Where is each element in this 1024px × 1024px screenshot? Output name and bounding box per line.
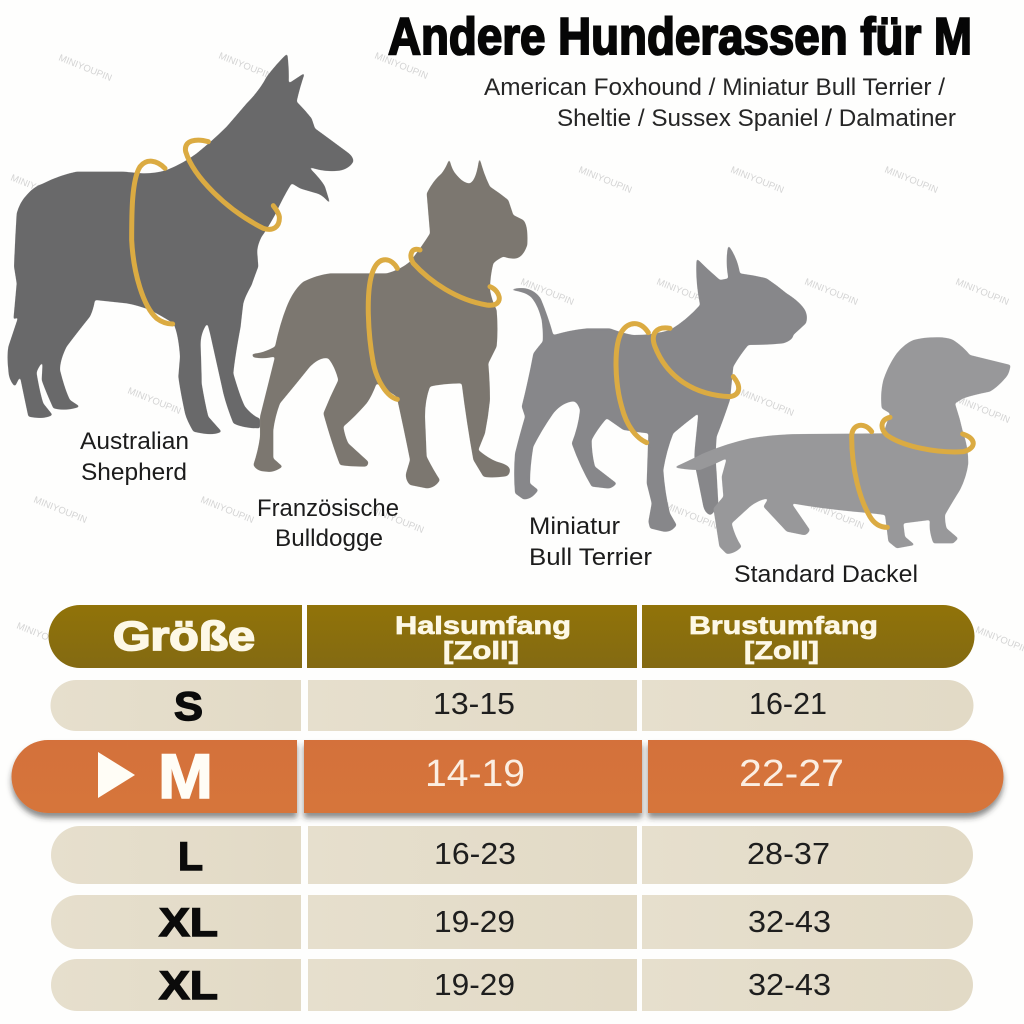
row M highlighted: 14-19 — [425, 753, 525, 795]
row L: 28-37 — [747, 836, 830, 871]
row XL second: 19-29 — [434, 967, 515, 1002]
table header: Halsumfang — [395, 612, 571, 640]
text: MINIYOUPIN — [519, 277, 575, 308]
dog: Miniature Bull Terrier — [509, 245, 807, 532]
label: Französische Bulldogge — [257, 495, 399, 552]
text: MINIYOUPIN — [126, 386, 182, 417]
text: MINIYOUPIN — [663, 501, 719, 532]
table header: [Zoll] — [744, 637, 819, 665]
label: Miniatur Bull Terrier — [529, 513, 652, 571]
chest ring — [616, 324, 648, 443]
text: MINIYOUPIN — [373, 51, 429, 82]
text: MINIYOUPIN — [199, 495, 255, 526]
text: MINIYOUPIN — [729, 165, 785, 196]
row XL: 32-43 — [748, 904, 831, 939]
chest ring — [852, 425, 887, 527]
subtitle: other breeds: American Foxhound / Miniatur Bull Terrier / — [484, 74, 945, 101]
row XL — [51, 895, 973, 949]
neck ring — [882, 417, 973, 452]
subtitle: other breeds — [484, 74, 956, 132]
label: Miniatur Bull Terrier: Bull Terrier — [529, 544, 652, 571]
text: MINIYOUPIN — [809, 501, 865, 532]
row XL second: XL — [159, 964, 218, 1008]
row S: 13-15 — [433, 686, 515, 721]
icon: pointer arrow — [98, 752, 135, 798]
label: Französische Bulldogge: Französische — [257, 495, 399, 522]
chest ring — [132, 161, 173, 324]
row L — [51, 826, 973, 884]
dog: French Bulldog — [252, 157, 527, 488]
text: MINIYOUPIN — [883, 165, 939, 196]
row XL second: 32-43 — [748, 967, 831, 1002]
row XL: 19-29 — [434, 904, 515, 939]
neck ring — [653, 328, 739, 397]
row M highlighted: 22-27 — [739, 753, 844, 795]
row XL: XL — [159, 901, 218, 945]
row L: L — [178, 835, 203, 879]
text: MINIYOUPIN — [32, 495, 88, 526]
label: Miniatur Bull Terrier: Miniatur — [529, 513, 620, 540]
neck ring — [411, 249, 499, 305]
table header: Größe — [113, 613, 255, 659]
text: MINIYOUPIN — [369, 505, 425, 536]
text: MINIYOUPIN — [955, 395, 1011, 426]
dog: Standard Dachshund — [674, 337, 1011, 554]
row M highlighted: M — [158, 742, 213, 812]
text: MINIYOUPIN — [15, 621, 71, 652]
chest ring — [368, 260, 397, 399]
text: MINIYOUPIN — [57, 53, 113, 84]
subtitle: other breeds: Sheltie / Sussex Spaniel / Dalmatiner — [557, 105, 956, 132]
row S — [50, 680, 974, 731]
dog: Australian Shepherd — [7, 53, 353, 434]
text: MINIYOUPIN — [803, 277, 859, 308]
neck ring — [185, 140, 279, 229]
label: Australian Shepherd — [80, 428, 189, 486]
text: MINIYOUPIN — [739, 388, 795, 419]
row M highlighted — [12, 740, 1004, 813]
label: Australian Shepherd: Australian — [80, 428, 189, 455]
row S: 16-21 — [749, 686, 827, 721]
text: MINIYOUPIN — [217, 51, 273, 82]
label: Standard Dackel: Standard Dackel — [734, 561, 918, 588]
row XL second — [51, 959, 973, 1011]
text: MINIYOUPIN — [9, 173, 65, 204]
row S: S — [174, 685, 203, 729]
table header: [Zoll] — [443, 637, 519, 665]
table header — [49, 605, 975, 668]
row L: 16-23 — [434, 836, 516, 871]
text: MINIYOUPIN — [655, 277, 711, 308]
text: MINIYOUPIN — [577, 165, 633, 196]
label: Australian Shepherd: Shepherd — [81, 459, 187, 486]
label: Französische Bulldogge: Bulldogge — [275, 525, 383, 552]
text: MINIYOUPIN — [954, 277, 1010, 308]
table header: Brustumfang — [689, 612, 878, 640]
